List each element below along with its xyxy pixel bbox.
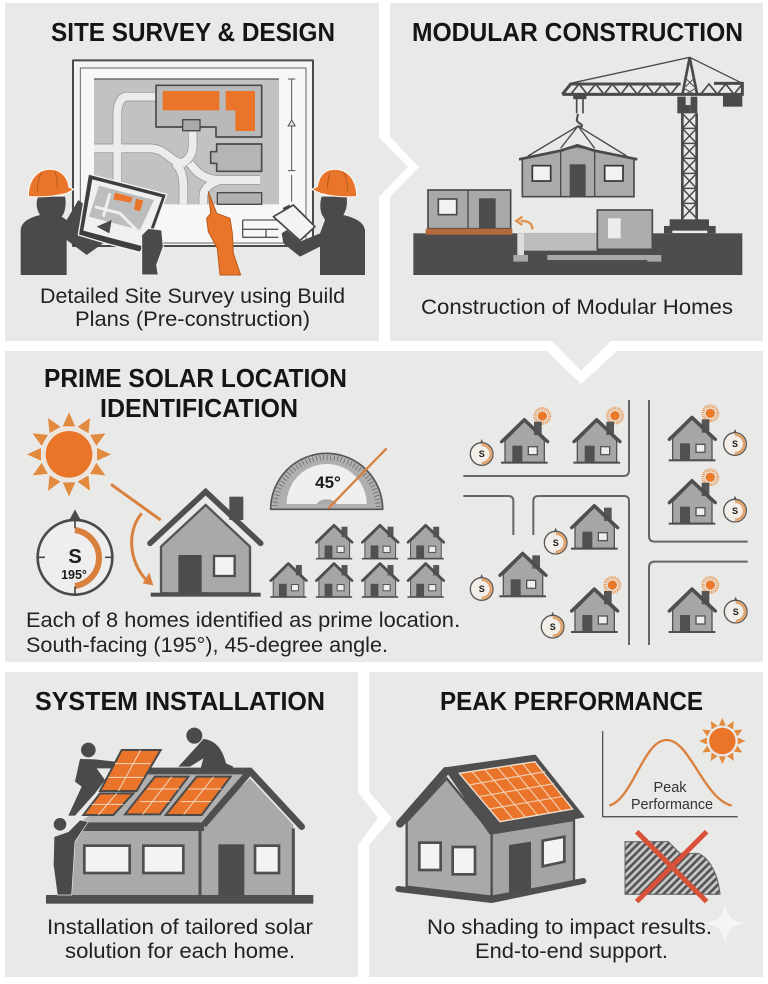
heading: MODULAR CONSTRUCTION bbox=[412, 17, 743, 47]
chart label bbox=[631, 780, 713, 813]
panel: prime solar location identification bbox=[5, 351, 763, 662]
caption bbox=[427, 915, 712, 963]
heading: SITE SURVEY & DESIGN bbox=[51, 17, 335, 47]
panel: system installation bbox=[5, 672, 378, 977]
heading: IDENTIFICATION bbox=[100, 393, 298, 423]
protractor label: 45° bbox=[315, 473, 341, 492]
illustration: blueprint with workers bbox=[21, 60, 365, 275]
illustration: installers on a roof bbox=[46, 728, 313, 904]
compasses bbox=[470, 429, 747, 638]
heading: PEAK PERFORMANCE bbox=[440, 686, 703, 716]
house bbox=[46, 771, 313, 904]
icon: compass bbox=[38, 509, 112, 595]
solar panels bbox=[83, 750, 231, 815]
panel: site survey and design bbox=[5, 3, 408, 341]
placed module bbox=[426, 190, 512, 235]
installer on ground bbox=[53, 818, 88, 895]
compass letters: S bbox=[550, 622, 556, 632]
house bbox=[150, 492, 261, 597]
compass letters: S bbox=[732, 439, 738, 449]
performance chart bbox=[603, 731, 738, 817]
ground bbox=[413, 233, 742, 275]
caption bbox=[40, 284, 345, 331]
hanging module bbox=[519, 126, 637, 197]
heading: PRIME SOLAR LOCATION bbox=[44, 363, 347, 393]
compass letters: S bbox=[479, 584, 485, 594]
heading bbox=[44, 363, 347, 423]
module in pit bbox=[597, 210, 652, 249]
orange arrow bbox=[516, 217, 532, 229]
neighbourhood map bbox=[457, 400, 748, 645]
caption: solution for each home. bbox=[65, 939, 295, 963]
compass letters: S bbox=[553, 538, 559, 548]
compass letters: S bbox=[732, 506, 738, 516]
left illustration bbox=[27, 412, 444, 598]
homes bbox=[499, 417, 715, 633]
installer on ladder bbox=[68, 743, 115, 816]
panel background with arrow bbox=[5, 3, 408, 341]
no shading icon bbox=[625, 832, 720, 902]
sparkle bbox=[705, 903, 745, 943]
compass labels: 195° bbox=[61, 568, 87, 582]
icon: sun bbox=[27, 412, 111, 496]
caption: South-facing (195°), 45-degree angle. bbox=[26, 633, 388, 657]
right worker bbox=[273, 169, 365, 275]
caption bbox=[26, 608, 460, 657]
chart label: Performance bbox=[631, 797, 713, 813]
orange pointing hand bbox=[207, 192, 241, 275]
caption: Installation of tailored solar bbox=[47, 915, 313, 939]
compass letters bbox=[479, 439, 739, 632]
caption: No shading to impact results. bbox=[427, 915, 712, 939]
compass labels bbox=[61, 546, 87, 582]
protractor bbox=[271, 448, 387, 509]
panel: modular construction bbox=[390, 3, 763, 371]
icon: sun bbox=[699, 718, 745, 764]
panel background with notch bbox=[5, 351, 763, 662]
compass letters: S bbox=[733, 607, 739, 617]
panel background with arrow bbox=[5, 672, 378, 977]
installer on roof bbox=[178, 728, 233, 771]
left worker bbox=[21, 169, 113, 275]
panel: peak performance bbox=[369, 672, 763, 977]
caption: Construction of Modular Homes bbox=[421, 295, 733, 319]
roads bbox=[463, 400, 748, 645]
arrow: sun ray and angle bbox=[111, 484, 161, 585]
caption bbox=[47, 915, 313, 963]
suns bbox=[535, 406, 718, 592]
caption: Detailed Site Survey using Build bbox=[40, 284, 345, 308]
blueprint sheet bbox=[73, 60, 313, 246]
caption: Plans (Pre-construction) bbox=[75, 307, 310, 331]
caption: End-to-end support. bbox=[475, 939, 668, 963]
illustration: house, chart, no shading bbox=[398, 718, 745, 943]
house with solar roof bbox=[398, 756, 583, 900]
compass letters: S bbox=[479, 449, 485, 459]
panel background with notch bbox=[369, 672, 763, 977]
compass labels: S bbox=[68, 546, 82, 568]
heading: SYSTEM INSTALLATION bbox=[35, 686, 325, 716]
tablet bbox=[78, 174, 167, 275]
illustration: crane and modules bbox=[413, 57, 742, 275]
panel background with arrow bbox=[390, 3, 763, 371]
caption: Each of 8 homes identified as prime location. bbox=[26, 608, 460, 632]
tower crane bbox=[562, 57, 742, 233]
chart label: Peak bbox=[653, 780, 687, 796]
small homes bbox=[270, 525, 444, 598]
